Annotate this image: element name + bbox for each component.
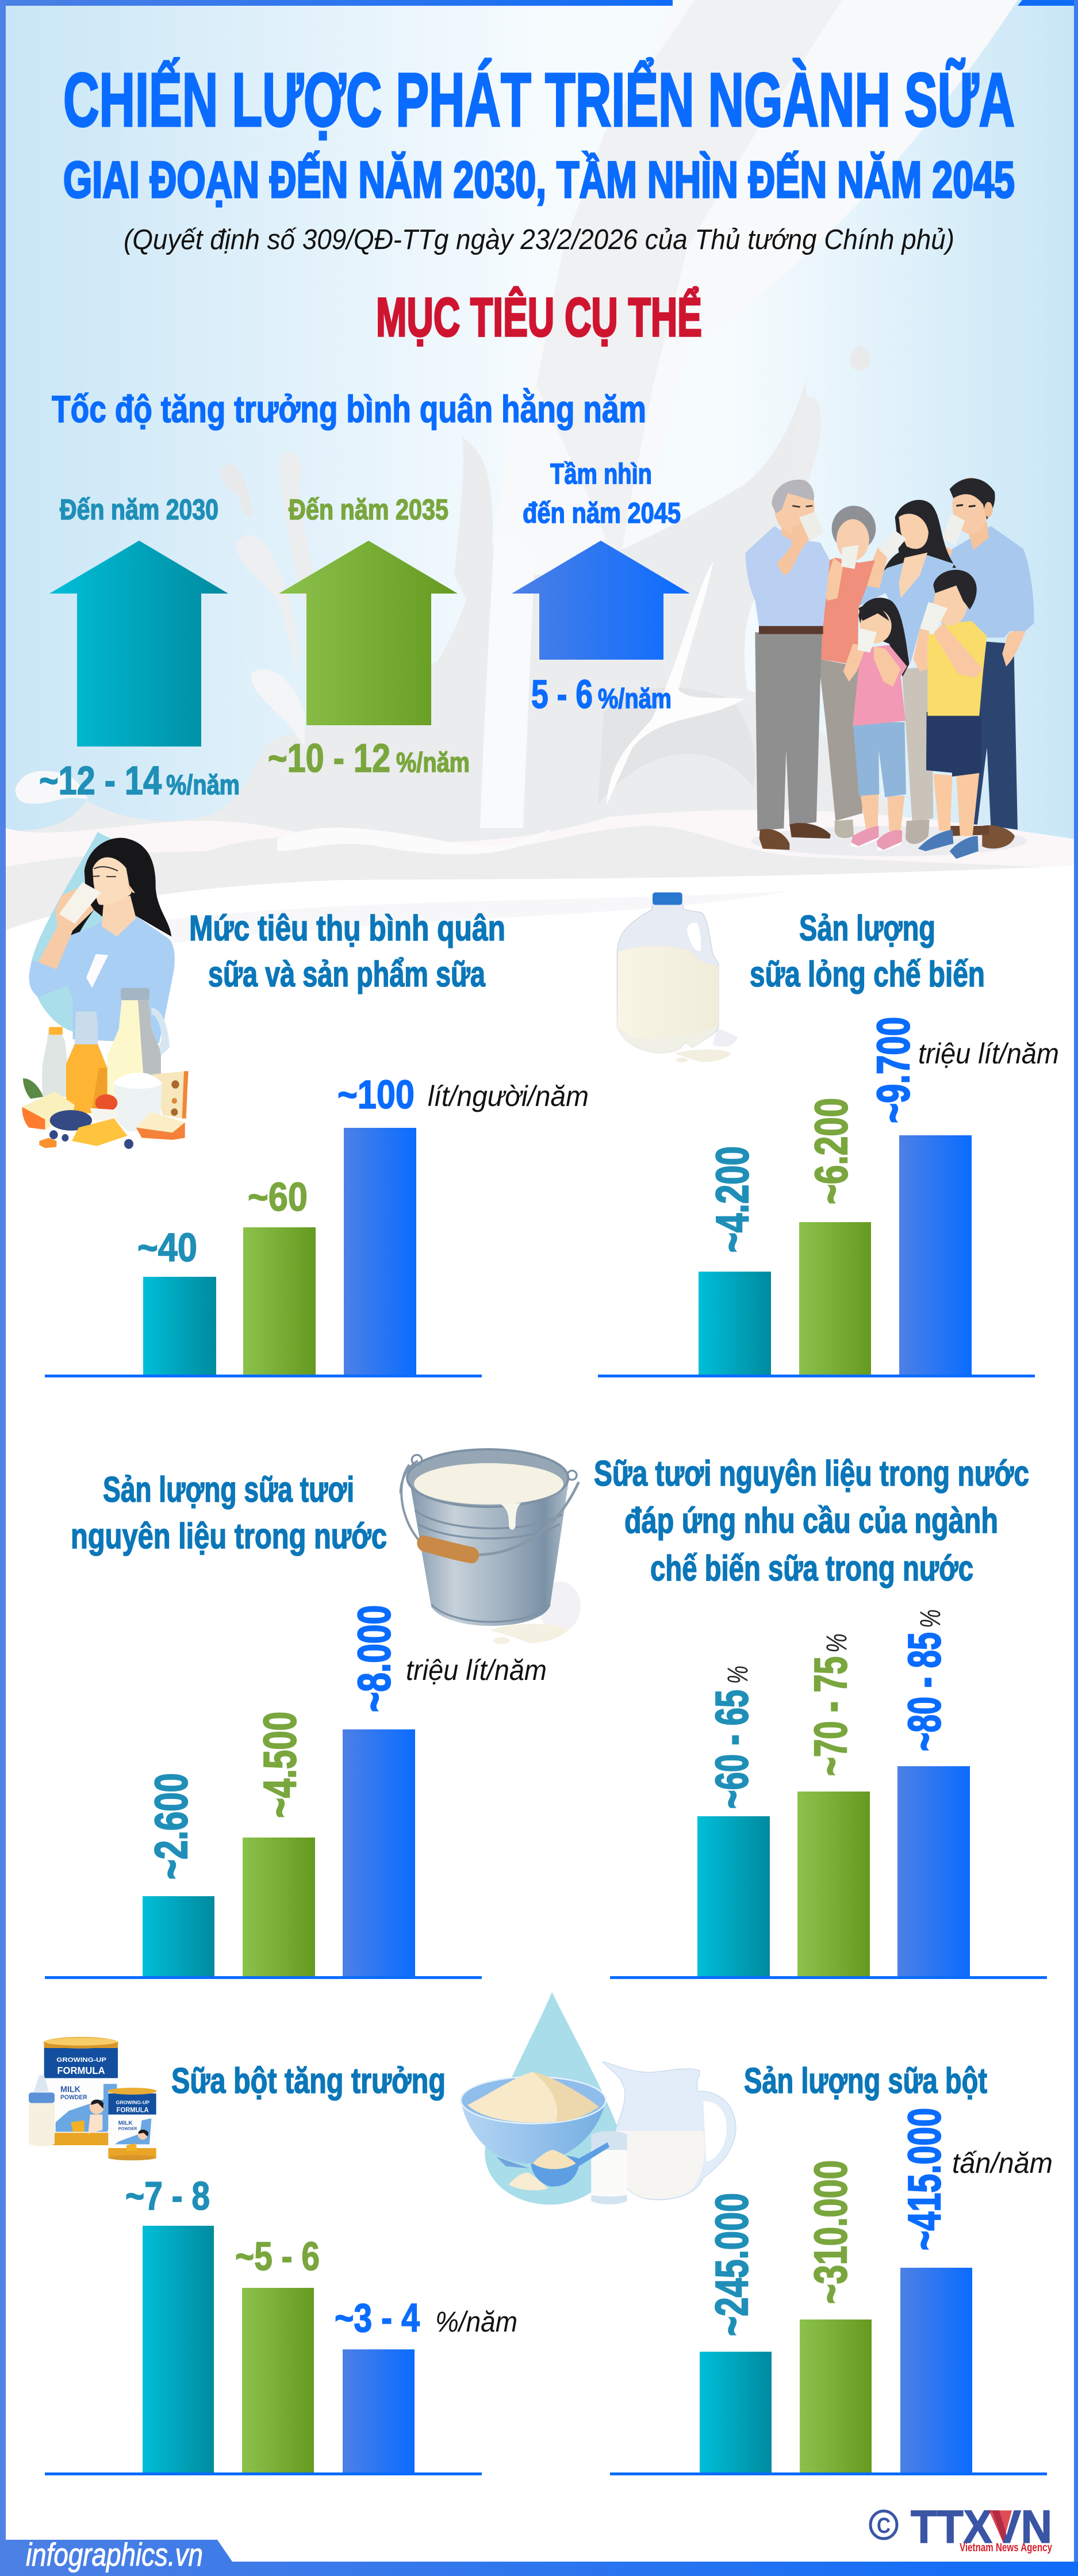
heading [750,909,985,994]
illustration: milk bucket [401,1449,581,1644]
heading: chế biến sữa trong nước [650,1549,973,1589]
logo: TTXVN: TTXVN [911,2501,1052,2553]
heading: Sản lượng sữa bột [744,2061,987,2101]
bar chart: ~5 - 6 [235,2234,320,2279]
bar chart: ~60 [248,1174,308,1219]
growth item: 2045 vision: 5 - 6 [531,672,593,717]
bar chart: ~3 - 4 [335,2295,420,2340]
growth item: 2035: ~10 - 12 [268,736,390,780]
growth item: 2045 vision [512,458,690,717]
illustration: formula cans and baby bottle: MILK [60,2085,80,2094]
growth item: 2030: Đến năm 2030 [60,493,218,526]
bar chart [45,1605,547,1979]
bar chart: ~4.200 [707,1146,758,1253]
growth item: 2045 vision: %/năm [598,684,672,714]
illustration: formula cans and baby bottle [29,2037,157,2160]
father [927,477,1034,848]
bar chart [610,2108,1053,2475]
bar chart: % [914,1609,946,1628]
girl [843,598,910,851]
grandfather [746,480,831,850]
bar chart: ~245.000 [706,2193,757,2336]
bar chart: ~310.000 [805,2160,856,2304]
heading [594,1454,1029,1589]
logo: TTXVN: Vietnam News Agency [960,2541,1053,2554]
illustration: formula cans and baby bottle: MILK [118,2120,133,2126]
panel: processed liquid milk output [598,893,1059,1377]
grandmother [808,506,876,838]
illustration: formula cans and baby bottle: POWDER [118,2126,137,2131]
bar chart [45,1072,589,1377]
bar chart: ~7 - 8 [125,2173,210,2218]
growth item: 2035: %/năm [396,748,470,778]
growth item: 2035 [268,493,470,780]
bar chart: ~40 [137,1225,197,1270]
panel: domestic raw milk share of processing demand [594,1454,1047,1979]
bar chart: ~9.700 [868,1017,919,1123]
bar chart [598,1017,1059,1377]
illustration: woman drinking milk with dairy products [22,832,189,1149]
bar chart: %/năm [435,2306,517,2338]
growth item: 2030: ~12 - 14 [39,758,162,803]
growth item: 2045 vision: Tầm nhìn [550,458,652,490]
boy [913,570,987,859]
illustration: formula cans and baby bottle: FORMULA [57,2065,105,2076]
logo: TTXVN: C [877,2514,891,2538]
heading: Sản lượng sữa tươi [103,1470,354,1510]
illustration: formula cans and baby bottle: GROWING-UP [116,2100,150,2105]
bar chart [45,2173,517,2475]
panel: milk powder output [610,2061,1053,2475]
bar chart: % [820,1633,853,1653]
bar chart: triệu lít/năm [406,1654,547,1686]
heading: sữa lỏng chế biến [750,955,985,994]
heading: Sản lượng [799,909,935,948]
bar chart: ~2.600 [145,1773,197,1880]
illustration: formula cans and baby bottle: POWDER [60,2094,87,2101]
bar chart: % [722,1666,754,1684]
bar chart: ~80 - 85 [899,1632,950,1751]
heading [71,1470,387,1556]
heading: specific targets: MỤC TIÊU CỤ THỂ [376,287,702,348]
bar chart: lít/người/năm [428,1080,589,1112]
subtitle: decision reference: (Quyết định số 309/QĐ-TTg ngày 23/2/2026 của Thủ tướng Chính phủ) [124,224,954,255]
bar chart: ~70 - 75 [805,1656,856,1776]
panel: domestic raw fresh milk output [45,1449,581,1979]
heading: annual growth rate: Tốc độ tăng trưởng bình quân hằng năm [52,388,646,430]
illustration: milk jug [617,893,738,1062]
heading: nguyên liệu trong nước [71,1517,387,1556]
bar chart: ~100 [337,1072,415,1117]
footer band [0,2536,1078,2576]
panel: milk and dairy consumption [22,832,589,1377]
heading [189,909,505,994]
bar chart [610,1609,1047,1979]
illustration: family drinking milk [746,477,1034,859]
illustration: formula cans and baby bottle: FORMULA [117,2106,149,2114]
bar chart: ~6.200 [805,1098,857,1204]
heading: sữa và sản phẩm sữa [208,955,485,994]
bar chart: ~60 - 65 [706,1690,757,1809]
illustration: bowl of milk powder, glass and pitcher [461,1992,736,2204]
growth item: 2045 vision: đến năm 2045 [523,497,681,529]
bar chart: ~415.000 [899,2108,950,2250]
mother [858,500,956,844]
illustration: formula cans and baby bottle: GROWING-UP [56,2057,106,2064]
bar chart: tấn/năm [952,2147,1053,2179]
panel: growing-up milk powder [29,2037,517,2475]
growth item: 2035: Đến năm 2035 [289,493,448,526]
growth item: 2030: %/năm [166,770,240,801]
title [63,58,1015,208]
heading: Sữa bột tăng trưởng [171,2061,446,2101]
bar chart: ~8.000 [348,1605,400,1712]
bar chart: ~4.500 [254,1712,305,1818]
heading: Mức tiêu thụ bình quân [189,909,505,948]
website label: infographics.vn [26,2536,203,2573]
bar chart: triệu lít/năm [918,1038,1059,1070]
growth item: 2030 [39,493,240,803]
